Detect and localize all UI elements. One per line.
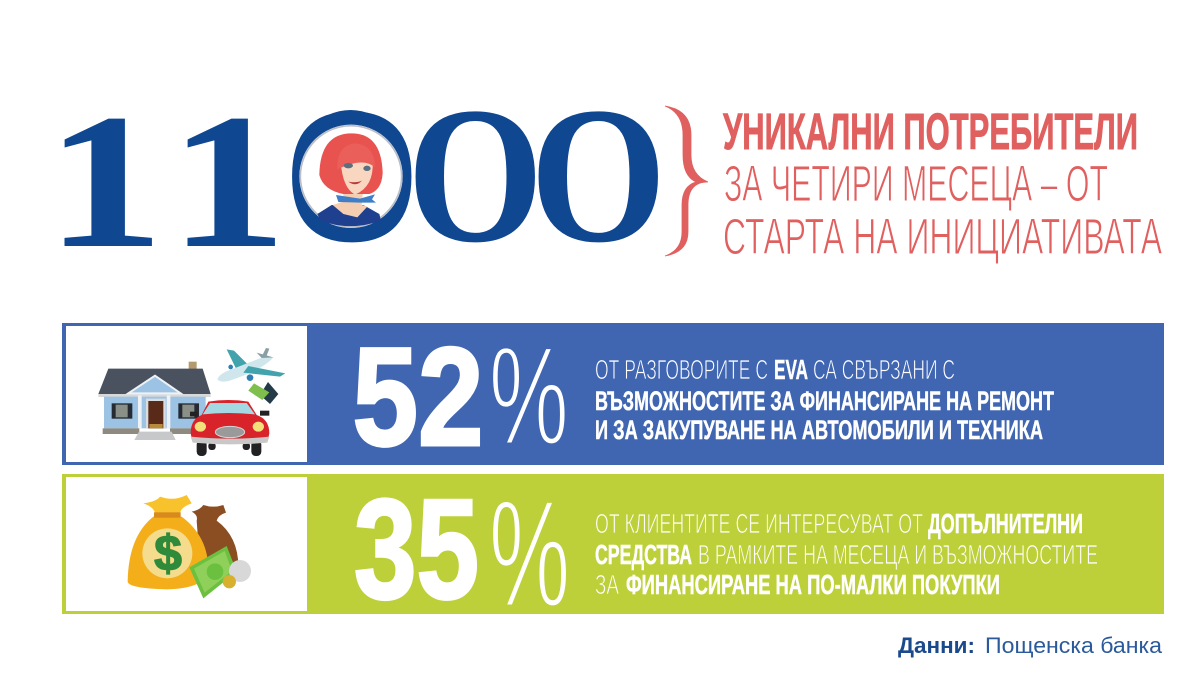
text block: 52 percent description: EVA — [774, 354, 808, 385]
icon panel: house, car, plane — [66, 326, 307, 462]
source credit: Данни: — [898, 633, 975, 658]
text block: 35 percent description — [595, 508, 1098, 600]
icon: EVA avatar — [299, 125, 403, 228]
headline number: 11 000: O — [407, 68, 544, 284]
big number: 35 percent: 35 — [354, 470, 479, 629]
heading text: unique users — [723, 103, 1162, 265]
big number: 35 percent — [354, 469, 570, 639]
panel: 52 percent — [62, 318, 1164, 475]
icon panel: money bags: $ — [154, 526, 182, 582]
text block: 35 percent description: СРЕДСТВА — [595, 539, 692, 570]
text block: 35 percent description: ОТ КЛИЕНТИТЕ СЕ ИНТЕРЕСУВАТ ОТ — [595, 508, 923, 539]
headline number: 11 000 — [46, 68, 667, 288]
icon panel: money bags — [66, 477, 307, 611]
headline number: 11 000: O — [284, 68, 420, 284]
text block: 52 percent description: ОТ РАЗГОВОРИТЕ С — [595, 354, 768, 385]
big number: 52 percent: % — [489, 318, 569, 474]
panel: 35 percent — [62, 469, 1164, 639]
curly brace — [665, 106, 708, 256]
text block: 52 percent description — [595, 354, 1054, 445]
text block: 35 percent description: ФИНАНСИРАНЕ НА ПО-МАЛКИ ПОКУПКИ — [626, 569, 1000, 600]
headline number: 11 000: 1 — [168, 74, 287, 288]
big number: 35 percent: % — [489, 469, 570, 639]
text block: 35 percent description: ЗА — [595, 569, 619, 600]
headline number: 11 000: O — [530, 68, 667, 284]
headline number: 11 000: 1 — [46, 74, 164, 288]
text block: 35 percent description: ДОПЪЛНИТЕЛНИ — [928, 508, 1083, 539]
text block: 52 percent description: СА СВЪРЗАНИ С — [813, 354, 955, 385]
source credit: Пощенска банка — [985, 633, 1163, 658]
source credit — [898, 633, 1163, 658]
big number: 52 percent: 52 — [352, 318, 484, 475]
